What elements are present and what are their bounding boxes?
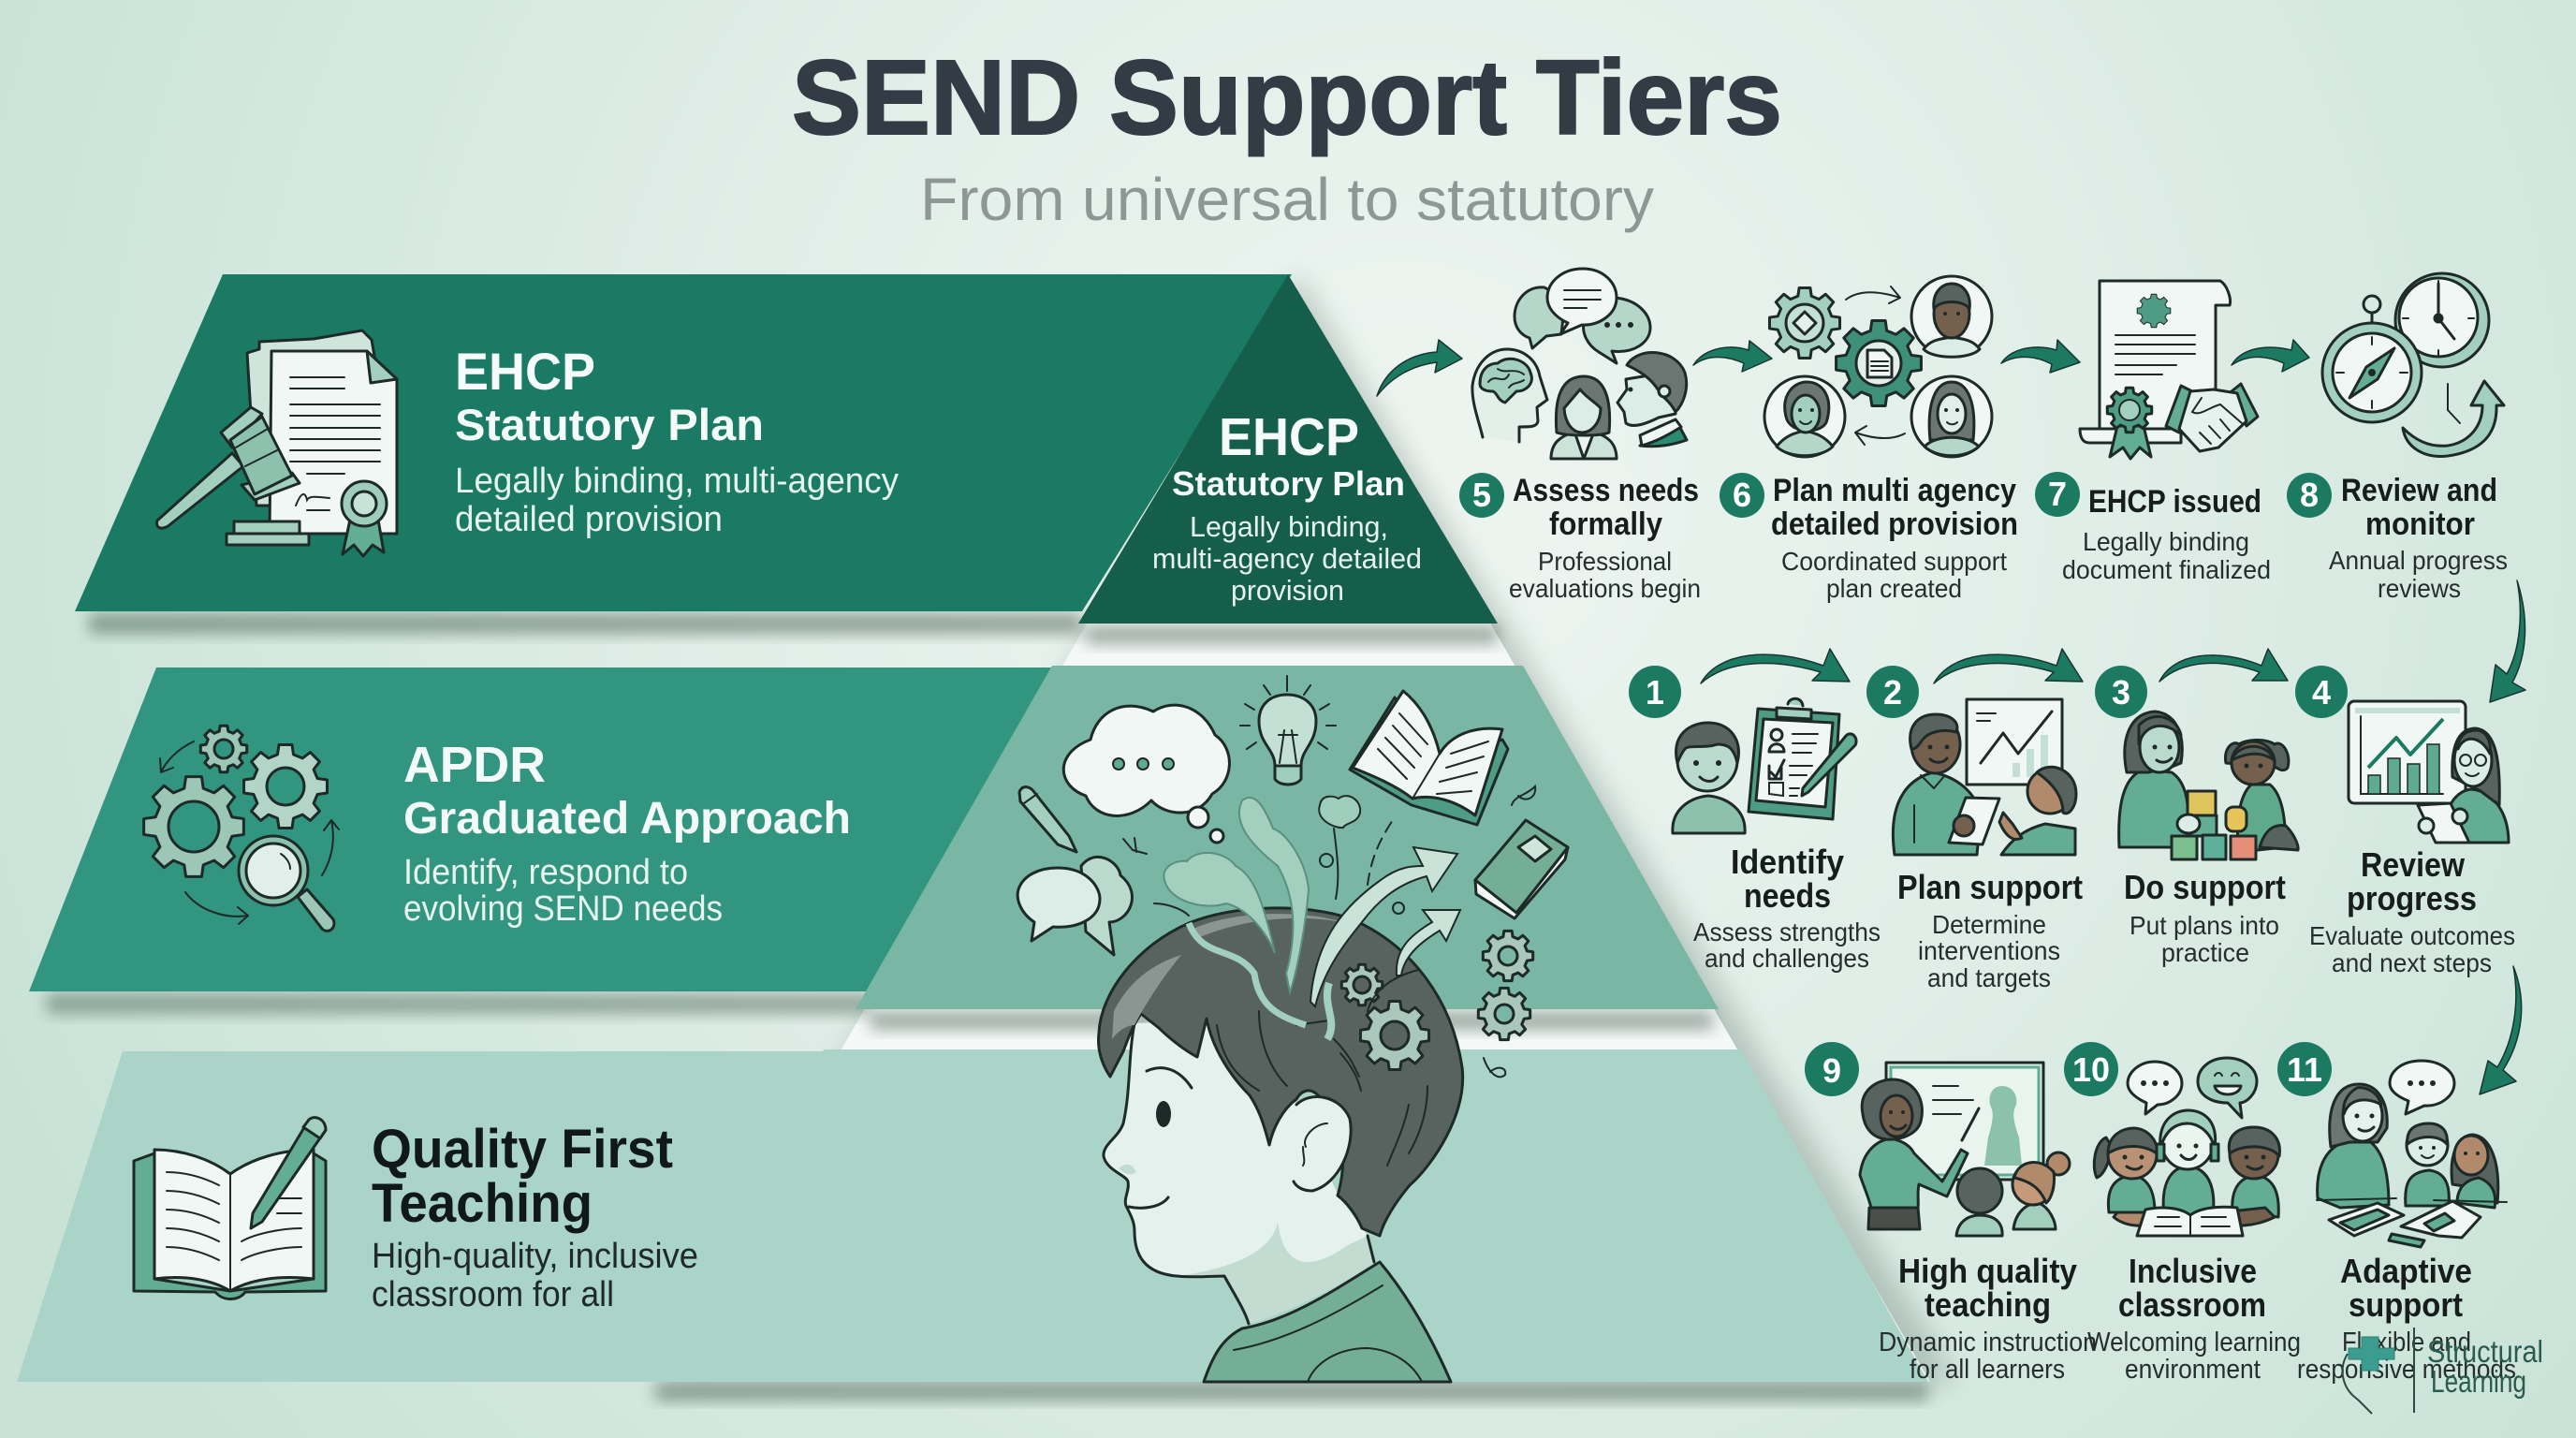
open book: [1350, 691, 1508, 825]
description: Annual progress: [2329, 546, 2508, 575]
panel: APDR Graduated Approach tier: [29, 666, 1719, 1009]
heading: [2118, 1252, 2266, 1324]
step 1: Identify needs: [1629, 666, 1881, 973]
badge 4: [2295, 666, 2348, 718]
badge 6: 6: [1733, 476, 1751, 514]
heading: Review and: [2341, 473, 2497, 508]
description: evolving SEND needs: [403, 889, 723, 929]
logo: Structural Learning: Learning: [2431, 1364, 2526, 1399]
gears in hair: [1341, 964, 1429, 1070]
description: [2329, 546, 2508, 603]
description: [2062, 527, 2271, 584]
description: [403, 853, 723, 929]
badge 10: 10: [2072, 1050, 2110, 1089]
icon: assessment team with speech bubbles: [1472, 269, 1687, 459]
description: [1693, 917, 1881, 973]
heading: [1731, 843, 1844, 915]
heading: [2347, 845, 2477, 917]
icon: teacher at whiteboard: [1860, 1063, 2070, 1236]
pyramid backing and shadows: [47, 274, 1956, 1401]
description: practice: [2161, 938, 2249, 967]
description: and targets: [1927, 963, 2051, 992]
badge 11: [2277, 1042, 2332, 1096]
heading: support: [2349, 1285, 2463, 1324]
heading: Quality First: [372, 1119, 673, 1180]
badge 11: 11: [2287, 1050, 2322, 1089]
badge 10: [2064, 1042, 2118, 1096]
description: evaluations begin: [1509, 574, 1701, 603]
step 2: Plan support: [1866, 666, 2083, 992]
heading: [455, 342, 764, 449]
description: Determine: [1932, 910, 2046, 939]
heading: Plan multi agency: [1773, 473, 2016, 508]
description: classroom for all: [372, 1275, 614, 1314]
heading: Assess needs: [1513, 473, 1699, 508]
shirt: [1204, 1262, 1451, 1382]
heading: formally: [1549, 506, 1662, 542]
icon: gears and magnifier: [144, 726, 339, 931]
heading: High quality: [1898, 1252, 2077, 1290]
badge 9: 9: [1822, 1051, 1841, 1090]
apex description: multi-agency detailed: [1152, 542, 1422, 575]
apex heading: Statutory Plan: [1172, 464, 1405, 503]
description: and challenges: [1705, 944, 1869, 973]
flow arrows: [1377, 340, 2525, 1094]
side gears: [1478, 931, 1533, 1040]
description: [2087, 1328, 2301, 1385]
description: Dynamic instruction: [1879, 1328, 2097, 1357]
heading: EHCP: [455, 342, 595, 401]
description: environment: [2125, 1355, 2261, 1385]
heading: [2341, 473, 2497, 542]
heading: teaching: [1925, 1285, 2051, 1324]
icon: pupils reading with speech bubbles: [2094, 1058, 2279, 1236]
closed book: [1475, 820, 1568, 918]
description: [2309, 921, 2515, 977]
badge 2: 2: [1883, 673, 1902, 712]
description: [455, 462, 899, 539]
badge 1: [1629, 666, 1681, 718]
logo: Structural Learning: [2343, 1328, 2543, 1414]
heading: [403, 737, 851, 844]
description: Put plans into: [2130, 911, 2279, 940]
icon: certificate and handshake: [2080, 281, 2258, 459]
icon: teacher planning with pupil: [1893, 699, 2076, 855]
tier band: [75, 274, 1292, 611]
icon: gears and agency portraits: [1764, 276, 1992, 457]
heading: Review: [2361, 845, 2466, 884]
badge 2: [1866, 666, 1919, 718]
badge 6: [1720, 473, 1764, 518]
speech bubbles: [1017, 857, 1132, 955]
description: [1918, 910, 2060, 992]
icon: progress chart review: [2349, 701, 2509, 843]
description: [1879, 1328, 2097, 1385]
description: Identify, respond to: [403, 853, 688, 892]
heading: progress: [2347, 879, 2477, 917]
description: Professional: [1538, 547, 1672, 576]
description: document finalized: [2062, 555, 2271, 584]
description: Welcoming learning: [2087, 1328, 2301, 1357]
icon: teacher guiding pupils with materials: [2317, 1061, 2507, 1247]
heading: Do support: [2124, 868, 2286, 906]
icon: clock, compass and cycle arrow: [2322, 273, 2504, 456]
heading: [372, 1119, 673, 1234]
badge 8: 8: [2300, 476, 2319, 514]
subtitle: From universal to statutory: [920, 166, 1654, 233]
description: Legally binding: [2083, 527, 2249, 556]
apex description: provision: [1231, 574, 1344, 607]
step 3: Do support: [2095, 666, 2298, 967]
step 5: Assess needs formally: [1459, 269, 1701, 603]
step 8: Review and monitor: [2287, 273, 2508, 603]
heading: Teaching: [372, 1173, 593, 1234]
thought cloud: [1063, 705, 1229, 843]
pyramid base: [650, 1049, 1928, 1382]
logo: Structural Learning: Structural: [2427, 1334, 2543, 1369]
description: Flexible and: [2342, 1328, 2471, 1357]
heading: classroom: [2118, 1285, 2266, 1324]
ear: [1294, 1097, 1351, 1191]
badge 8: [2287, 473, 2332, 518]
apex heading: EHCP: [1219, 407, 1359, 467]
description: plan created: [1826, 574, 1962, 603]
description: responsive methods: [2297, 1355, 2516, 1385]
heading: Plan support: [1897, 868, 2083, 906]
light bulb: [1240, 676, 1336, 785]
heading: [2340, 1252, 2472, 1324]
hair: [1099, 908, 1463, 1236]
heading: [1771, 473, 2018, 542]
step 4: Review progress: [2295, 666, 2515, 977]
apex description: [1152, 510, 1422, 607]
badge 7: [2035, 472, 2080, 517]
badge 9: [1805, 1042, 1859, 1096]
badge 4: 4: [2312, 673, 2331, 712]
apex heading: [1172, 407, 1405, 503]
description: Assess strengths: [1693, 917, 1881, 946]
panel: Quality First Teaching tier: [17, 1049, 1928, 1382]
description: and next steps: [2332, 948, 2492, 977]
face: [1104, 1020, 1374, 1324]
pyramid middle: [856, 666, 1719, 1009]
description: for all learners: [1910, 1355, 2065, 1385]
description: [1781, 547, 2007, 603]
description: interventions: [1918, 936, 2060, 965]
pencil: [1019, 787, 1076, 852]
icon: adult and child with blocks: [2119, 712, 2298, 859]
heading: Statutory Plan: [455, 400, 764, 449]
heading: Graduated Approach: [403, 794, 851, 844]
badge 5: [1459, 473, 1504, 518]
tier band: [29, 668, 1058, 991]
heading: EHCP issued: [2088, 484, 2261, 520]
step 11: Adaptive support: [2277, 1042, 2516, 1385]
heading: detailed provision: [1771, 506, 2018, 542]
heading: [1513, 473, 1699, 542]
pyramid apex: [1078, 274, 1498, 624]
heading: Inclusive: [2129, 1252, 2257, 1290]
heading: [1898, 1252, 2077, 1324]
badge 3: 3: [2112, 673, 2130, 712]
description: [2130, 911, 2279, 967]
description: High-quality, inclusive: [372, 1237, 698, 1276]
heading: needs: [1744, 876, 1831, 915]
title: SEND Support Tiers: [792, 38, 1782, 156]
description: Legally binding, multi-agency: [455, 462, 899, 501]
heading: monitor: [2365, 506, 2475, 542]
badge 5: 5: [1472, 476, 1491, 514]
step 6: Plan multi agency detailed provision: [1720, 276, 2018, 603]
badge 1: 1: [1646, 673, 1664, 712]
description: [372, 1237, 698, 1314]
heading: Identify: [1731, 843, 1844, 881]
heading: Adaptive: [2340, 1252, 2472, 1290]
icon: boy with clipboard: [1673, 698, 1856, 833]
icon: open book and pencil: [134, 1118, 326, 1299]
illustration: child with ideas rising from head: [1017, 676, 1568, 1382]
description: Coordinated support: [1781, 547, 2007, 576]
badge 3: [2095, 666, 2147, 718]
badge 7: 7: [2048, 475, 2067, 513]
description: Evaluate outcomes: [2309, 921, 2515, 950]
panel: EHCP Statutory Plan tier: [75, 274, 1498, 624]
step 10: Inclusive classroom: [2064, 1042, 2301, 1385]
heading: APDR: [403, 737, 546, 793]
step 9: High quality teaching: [1805, 1042, 2097, 1385]
smoke of thoughts: [1123, 786, 1535, 1077]
description: reviews: [2378, 574, 2461, 603]
description: detailed provision: [455, 500, 723, 539]
step 7: EHCP issued: [2035, 281, 2271, 584]
icon: document, gavel and rosette: [156, 330, 397, 556]
description: [2297, 1328, 2516, 1385]
description: [1509, 547, 1701, 603]
apex description: Legally binding,: [1190, 510, 1388, 543]
tier band: [17, 1051, 827, 1382]
